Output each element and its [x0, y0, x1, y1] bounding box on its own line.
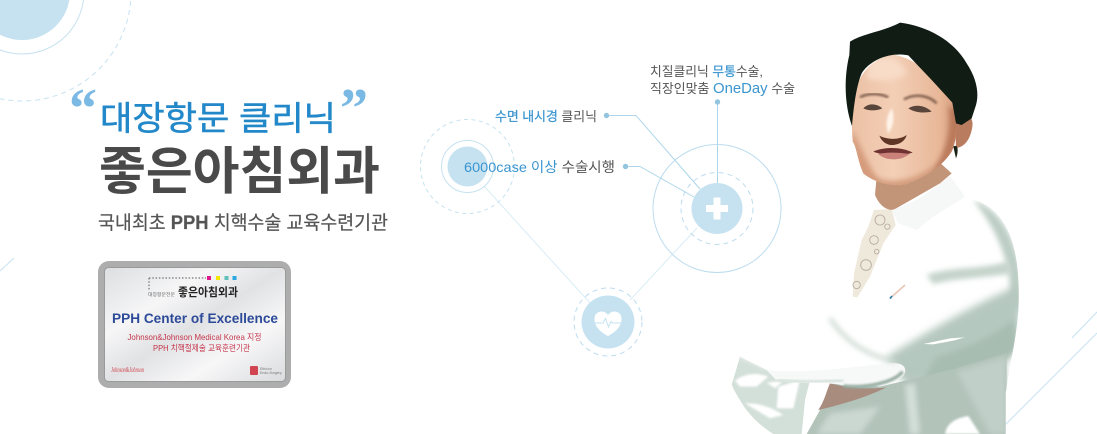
shirt collar	[892, 176, 965, 230]
torso folds	[905, 383, 920, 434]
coat	[732, 200, 1019, 434]
label: painless surgery and one-day surgery: 직장인맞춤 OneDay 수술	[650, 80, 795, 97]
shoulder shading	[973, 200, 1022, 310]
closing quotation mark: ”	[340, 78, 368, 140]
hair	[846, 23, 977, 126]
eye left	[863, 104, 882, 110]
right arm shading	[887, 285, 1020, 387]
opening quotation mark: “	[69, 78, 97, 140]
node dots	[604, 99, 720, 169]
plaque logo small text: 대장항문전문	[148, 291, 175, 298]
decorative corner circles, top left	[0, 0, 131, 101]
eyebrow right	[904, 96, 937, 103]
face shading	[852, 132, 878, 181]
plaque sponsor logo right: Ethicon	[260, 367, 272, 371]
nose highlight	[887, 108, 893, 133]
plaque red line 2: PPH 치핵절제술 교육훈련기관	[153, 343, 250, 353]
hand and wrist	[818, 383, 887, 410]
subtitle: 국내최초 PPH 치핵수술 교육수련기관	[98, 212, 388, 234]
node: 6000 cases circle	[420, 120, 514, 214]
heading: hospital name: 좋은아침외과	[99, 143, 380, 200]
connector lines	[484, 102, 718, 303]
forearm	[767, 363, 905, 387]
decorative diagonal lines	[0, 258, 1097, 425]
face	[852, 55, 956, 185]
certificate plaque	[98, 261, 291, 388]
label: painless surgery and one-day surgery: 치질클리닉 무통수술,	[650, 64, 763, 79]
eye right	[908, 106, 932, 113]
plaque logo dots	[149, 276, 236, 291]
pen in pocket	[890, 285, 905, 298]
plaque sponsor logo right: Endo-Surgery	[260, 371, 282, 375]
label: 6000 cases: 6000case 이상 수술시행	[464, 159, 615, 175]
illustration: doctor in white coat	[720, 23, 1037, 434]
heading: clinic name: 대장항문 클리닉	[100, 101, 336, 138]
nose shadow	[879, 135, 907, 145]
label: sleep endoscopy: 수면 내시경 클리닉	[495, 109, 597, 124]
plaque logo name: 좋은아침외과	[178, 285, 238, 299]
plaque sponsor logo right	[250, 366, 282, 375]
ear	[955, 115, 973, 148]
plaque sponsor logo left: Johnson&Johnson	[111, 366, 144, 374]
mouth	[873, 148, 913, 159]
node: heart icon	[574, 288, 642, 356]
tie	[853, 209, 896, 297]
label: painless surgery and one-day surgery	[650, 64, 795, 97]
near sleeve cuff	[732, 357, 810, 434]
arm highlights	[923, 337, 965, 344]
lower torso	[807, 353, 1007, 434]
node: central cross icon	[653, 144, 781, 272]
plaque title: PPH Center of Excellence	[112, 311, 278, 326]
plaque red line 1: Johnson&Johnson Medical Korea 지정	[128, 332, 262, 342]
eyebrow left	[860, 94, 888, 97]
neck	[875, 157, 952, 210]
